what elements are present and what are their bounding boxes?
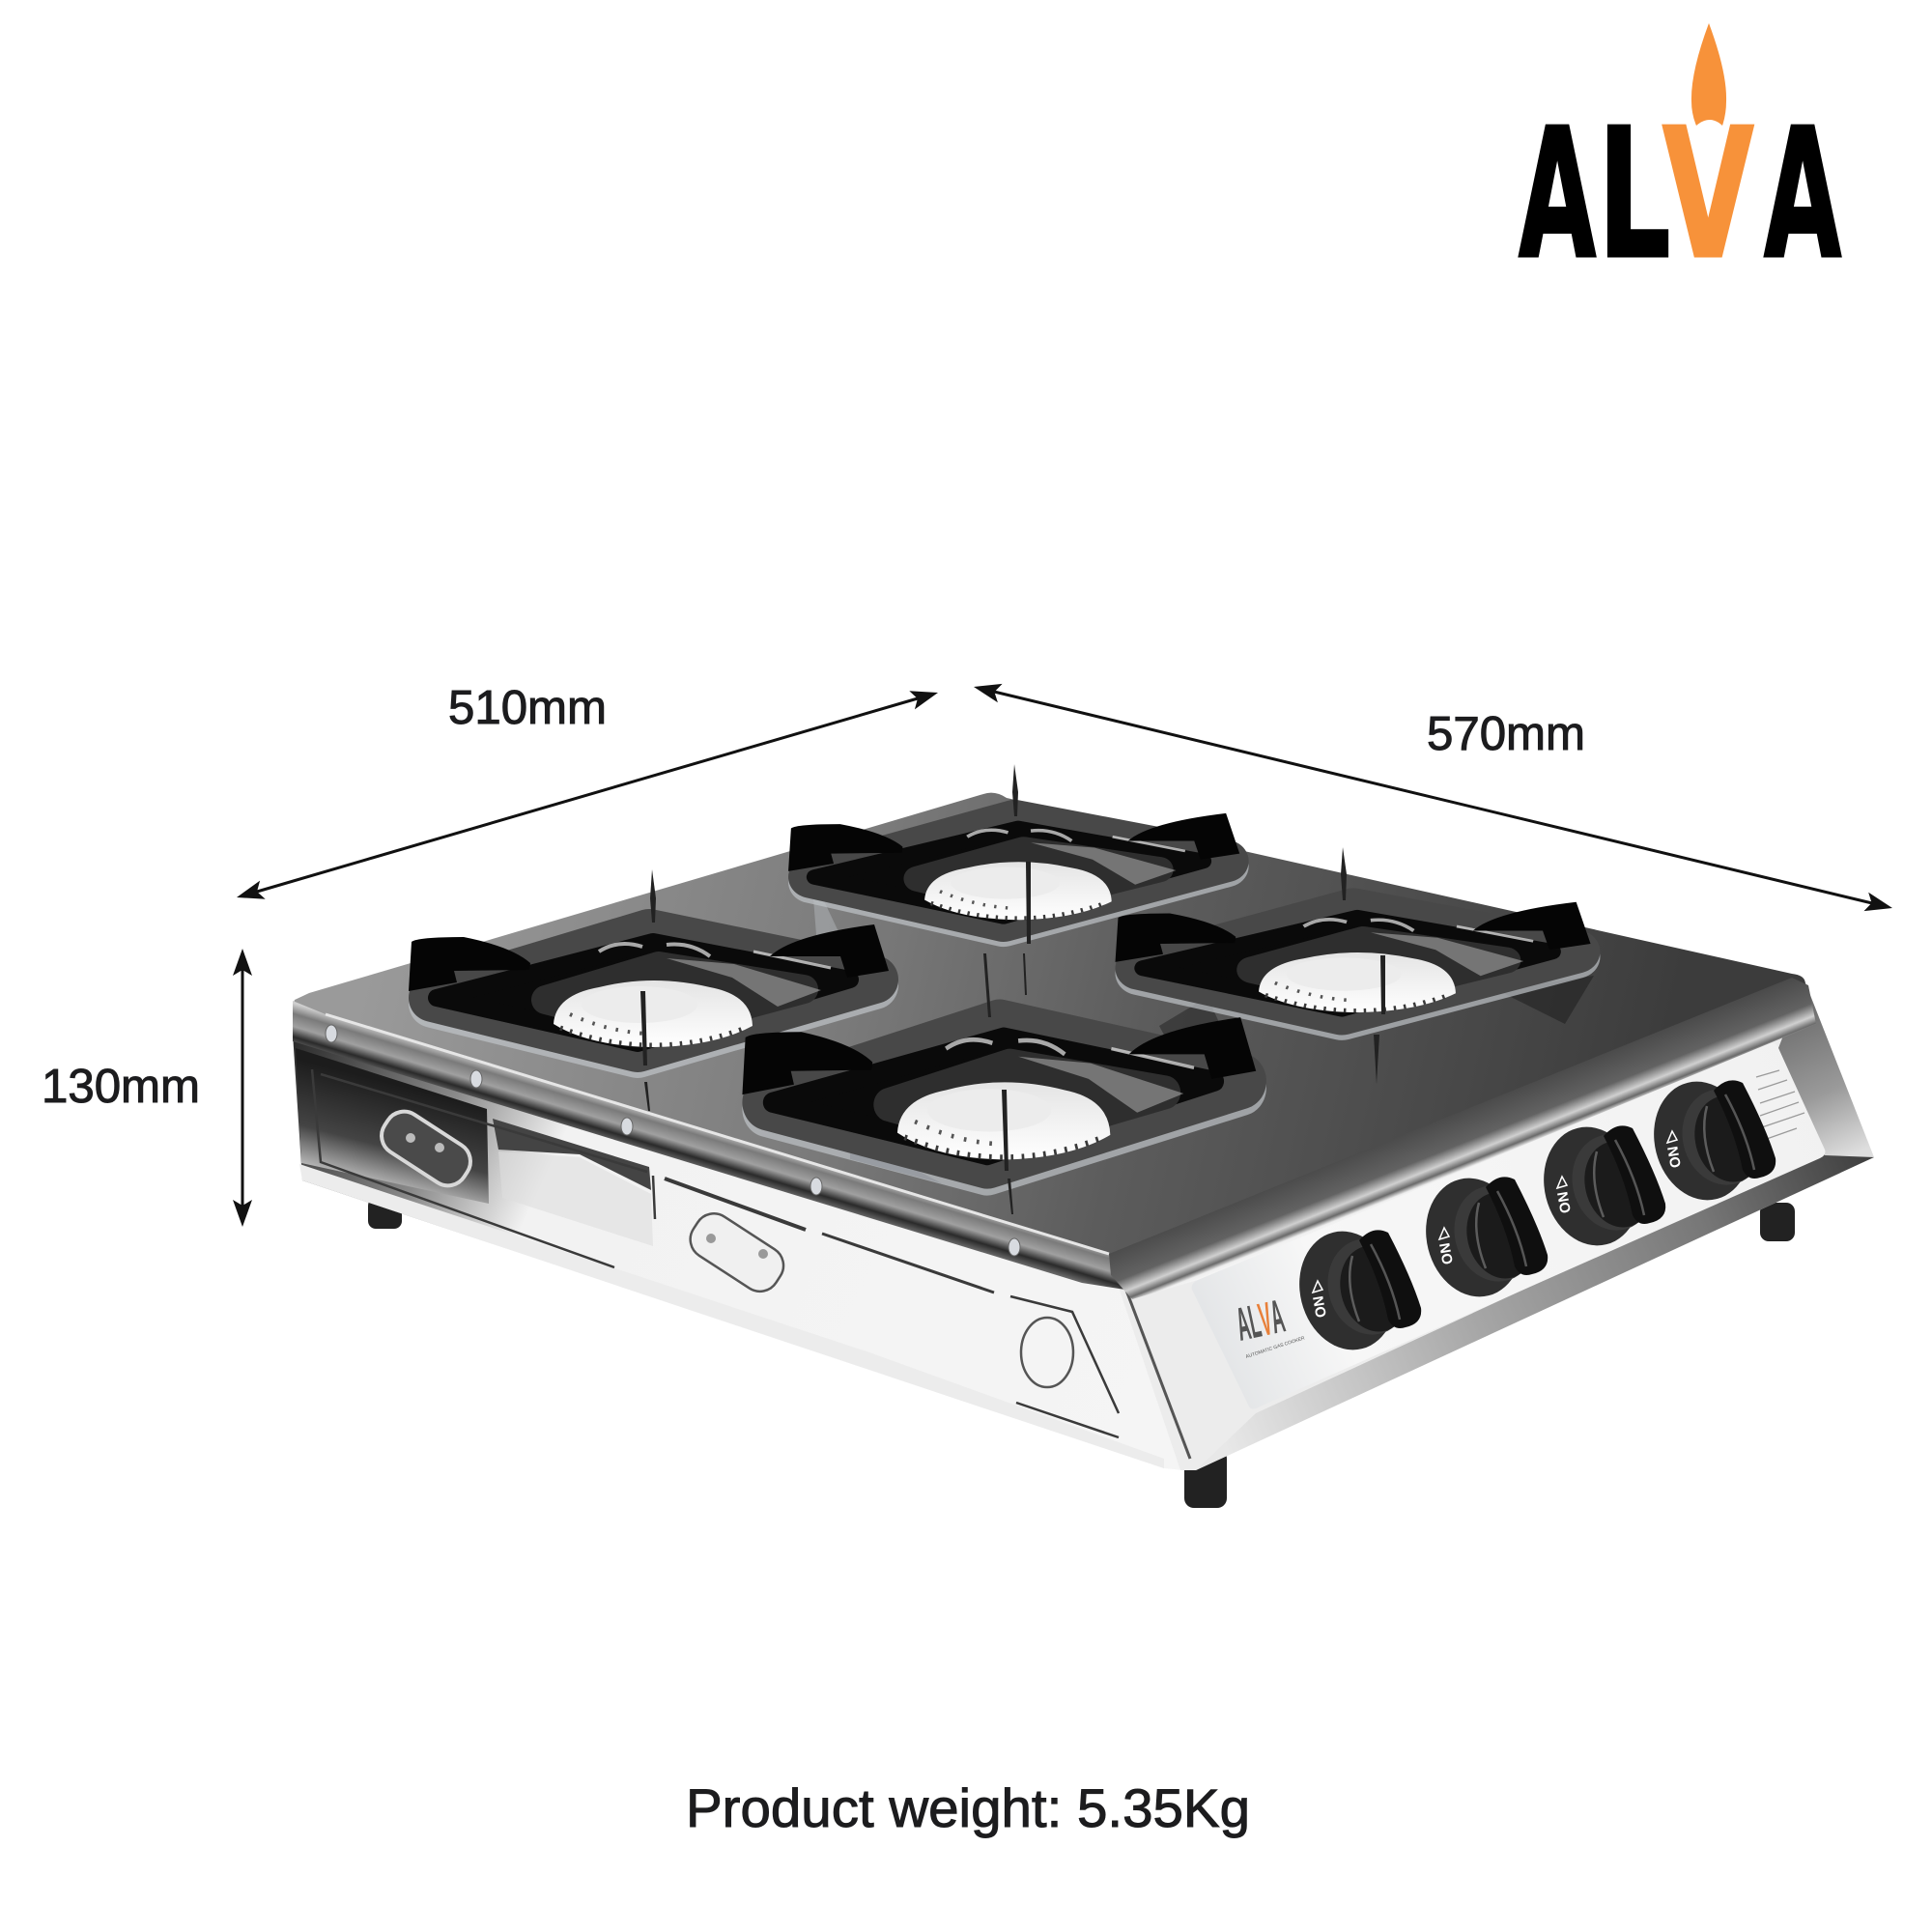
burner: back [788,813,1239,925]
dimension arrow: 510mm [237,691,938,899]
front panel [1108,980,1874,1470]
control knob 3 [1531,1117,1665,1256]
control knob 1 [1287,1221,1421,1360]
logo letters: A [1764,92,1841,298]
stove product illustration [293,764,1874,1508]
left lip band [293,1001,1125,1290]
side panel [293,1034,1183,1470]
burner: right [1116,902,1591,1018]
plate small logo: ALVA [1232,1290,1289,1350]
stove feet [368,1198,1795,1508]
side round emboss [1021,1318,1073,1387]
burner: front [742,1017,1256,1168]
pan support spikes [640,764,1385,1214]
control label plate [1192,1043,1825,1408]
plate caption: AUTOMATIC GAS COOKER [1245,1335,1306,1360]
logo letters: L [1598,90,1670,298]
logo: ALVA with flame [1519,23,1841,298]
side oval plate middle [683,1207,791,1298]
rivets [326,1025,1020,1256]
control knob 2 [1413,1168,1548,1307]
control knob 4 [1641,1071,1776,1210]
dimension arrow: 570mm [974,684,1892,911]
dimension label: 570mm: 570mm [1427,708,1585,760]
dimension label: 510mm: 510mm [448,682,607,734]
dimension arrow: 130mm [233,949,252,1227]
logo letters: A [1519,92,1596,298]
stove top surface [294,793,1805,1256]
dimension label: 130mm: 130mm [42,1061,200,1113]
plate instructions [1756,1070,1804,1140]
logo letters [1519,90,1841,298]
top reflections [811,874,1594,1183]
logo flame [1691,23,1726,126]
burner: left [409,924,889,1054]
product weight caption: Product weight: 5.35Kg [686,1777,1250,1838]
logo letters: V [1662,91,1753,298]
side oval plate rear [374,1104,478,1193]
front lip band [1109,978,1816,1299]
